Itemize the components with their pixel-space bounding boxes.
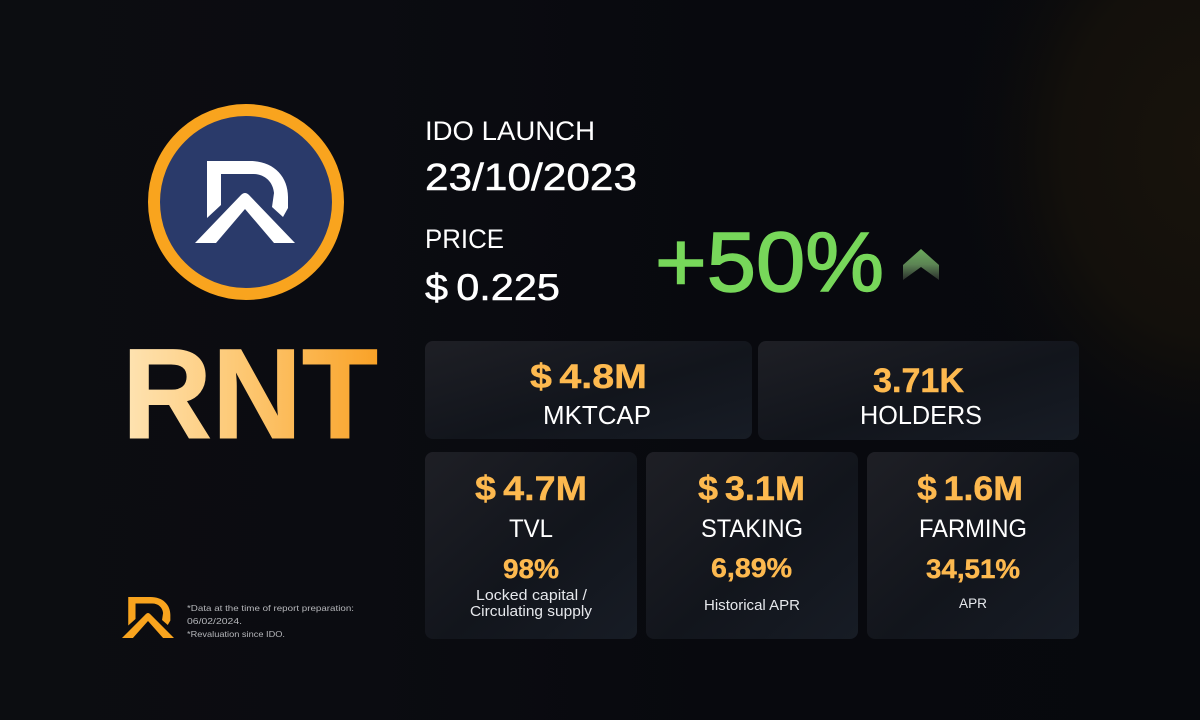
- panel: farming: APR: [959, 595, 987, 611]
- icon: up chevron: [903, 249, 939, 280]
- panel: TVL: Circulating supply: [470, 604, 593, 620]
- panel: farming: 34,51%: [926, 554, 1020, 584]
- panel: market cap: $ 4.8M: [530, 358, 647, 396]
- panel: staking: Historical APR: [704, 598, 800, 614]
- panel: TVL: $ 4.7M: [475, 470, 587, 508]
- price label: PRICE: [425, 224, 504, 254]
- panel: market cap: [425, 341, 752, 439]
- panel: staking: STAKING: [701, 515, 803, 543]
- panel: staking: [646, 452, 858, 639]
- panel: TVL: TVL: [509, 515, 553, 543]
- panel: farming: [867, 452, 1079, 639]
- footnote: *Revaluation since IDO.: [187, 629, 285, 639]
- IDO launch label: IDO LAUNCH: [425, 116, 595, 146]
- footnote: *Data at the time of report preparation:: [187, 603, 354, 613]
- price value: $ 0.225: [425, 267, 560, 308]
- panel: market cap: MKTCAP: [543, 400, 651, 430]
- panel: holders: HOLDERS: [860, 400, 982, 430]
- panel: holders: [758, 341, 1079, 440]
- panel: farming: $ 1.6M: [917, 470, 1023, 508]
- icon: small logo: [122, 597, 174, 638]
- title: RNT: RNT: [122, 323, 378, 466]
- footnote: [187, 603, 354, 639]
- panel: TVL: 98%: [503, 554, 559, 584]
- panel: farming: FARMING: [919, 515, 1027, 543]
- panel: staking: 6,89%: [711, 553, 792, 583]
- panel: staking: $ 3.1M: [698, 470, 805, 508]
- price change: +50%: [655, 215, 884, 309]
- footnote: 06/02/2024.: [187, 616, 242, 626]
- icon: RNT round logo: [154, 110, 338, 294]
- panel: TVL: Locked capital /: [476, 588, 588, 604]
- panel: holders: 3.71K: [873, 362, 964, 400]
- panel: TVL: [425, 452, 637, 639]
- IDO launch date: 23/10/2023: [425, 157, 637, 199]
